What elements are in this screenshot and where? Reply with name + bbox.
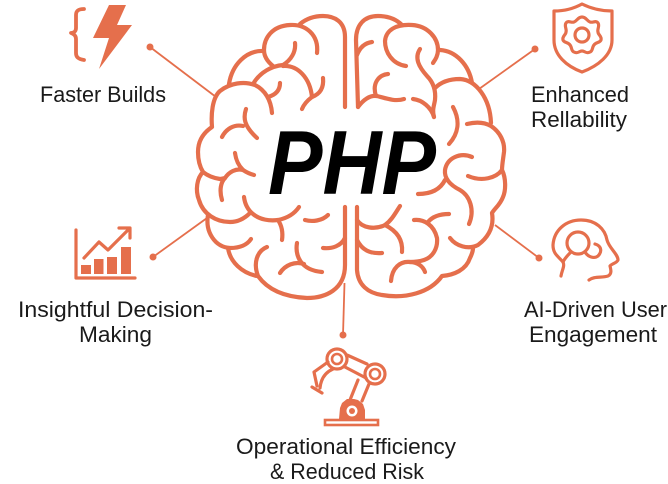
icon: shield with gear (554, 4, 612, 72)
connector: enhanced reliability (479, 46, 538, 89)
label: Enhanced Reliability (531, 82, 629, 132)
brain illustration (197, 16, 505, 298)
label: Insightful Decision-Making (18, 297, 213, 347)
connector: operational efficiency (340, 283, 346, 338)
label: AI-Driven User Engagement: AI-Driven User (524, 297, 667, 322)
icon: robot arm (312, 349, 385, 425)
title: PHP: PHP (268, 113, 436, 214)
label: Operational Efficiency & Reduced Risk: Operational Efficiency (236, 434, 457, 459)
connector: insightful decision-making (150, 218, 207, 260)
label: AI-Driven User Engagement (524, 297, 667, 347)
label: Insightful Decision-Making: Insightful Decision- (18, 297, 213, 322)
label: AI-Driven User Engagement: Engagement (529, 322, 658, 347)
label: Faster Builds: Faster Builds (40, 82, 166, 107)
label: Operational Efficiency & Reduced Risk (236, 434, 457, 484)
connector: AI-driven engagement (495, 225, 542, 262)
label: Operational Efficiency & Reduced Risk: & Reduced Risk (270, 459, 425, 484)
icon: growth bar chart (76, 228, 135, 278)
icon: braces and lightning bolt (71, 5, 132, 69)
left hemisphere (197, 16, 345, 298)
label: Enhanced Reliability: Rellability (531, 107, 628, 132)
label: Enhanced Reliability: Enhanced (531, 82, 629, 107)
icon: head with gear mind (553, 220, 618, 280)
right hemisphere (356, 16, 505, 296)
connector: faster builds (146, 44, 216, 97)
label: Insightful Decision-Making: Making (79, 322, 152, 347)
